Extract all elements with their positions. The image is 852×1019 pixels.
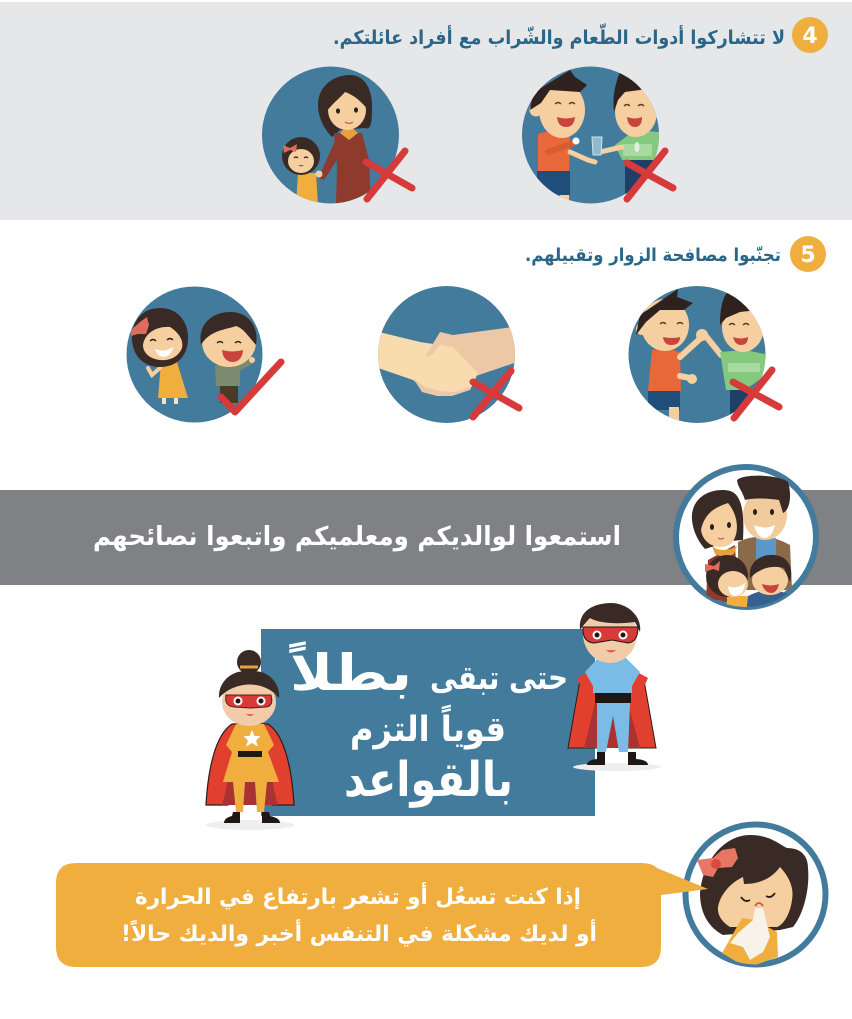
band text: استمعوا لوالديكم ومعلميكم واتبعوا نصائحهم [93, 522, 621, 552]
callout line 2: أو لديك مشكلة في التنفس أخبر والديك حالاً! [121, 918, 597, 947]
icon: superhero girl [206, 650, 294, 830]
panel: rule 4 background [0, 2, 852, 220]
panel: hero message box [261, 629, 595, 816]
icon: children waving, correct greeting [126, 286, 281, 422]
icon: two boys sharing a glass, do not share [522, 66, 673, 207]
rule 5 heading: تجنّبوا مصافحة الزوار وتقبيلهم. [525, 245, 781, 266]
icon: two boys high five, avoid [628, 286, 779, 424]
line 1 small: حتى تبقى [430, 658, 568, 697]
callout line 1: إذا كنت تسعُل أو تشعر بارتفاع في الحرارة [135, 881, 581, 910]
icon: family portrait [676, 467, 816, 615]
panel: listen to parents band [0, 490, 852, 585]
icon: handshake, avoid [375, 286, 520, 423]
rule 4 number badge [792, 17, 828, 53]
line 1 large: بطلاً [289, 641, 412, 702]
line 3: بالقواعد [344, 752, 513, 808]
line 2: قوياً التزم [350, 704, 506, 750]
hero heading [289, 641, 568, 808]
rule 4 number badge: 4 [802, 24, 818, 49]
icon: girl sneezing into tissue [686, 824, 826, 968]
rule 4 heading: لا تتشاركوا أدوات الطّعام والشّراب مع أفراد عائلتكم. [333, 24, 785, 49]
rule 5 number badge: 5 [800, 243, 816, 268]
callout: tell your parents [56, 863, 708, 967]
rule 5 number badge [790, 236, 826, 272]
icon: superhero boy [568, 603, 661, 771]
icon: mother and daughter, do not share [262, 66, 412, 205]
